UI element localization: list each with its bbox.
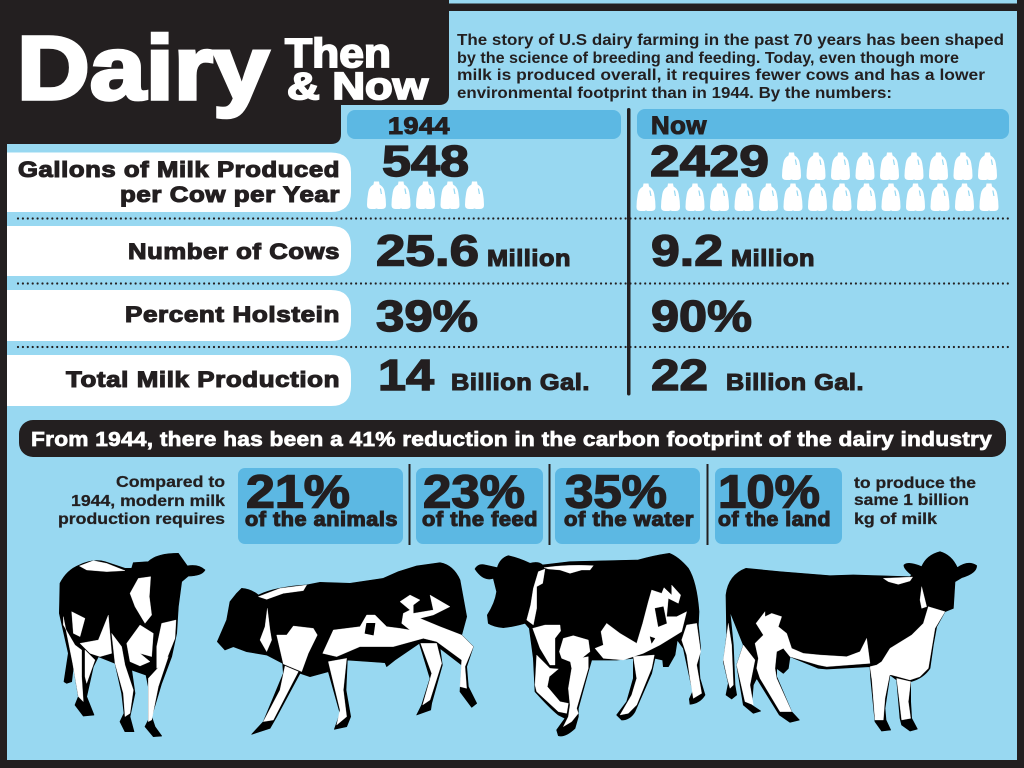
cow 2: side view facing left: [217, 563, 477, 734]
stat box: water: of the water: [564, 509, 694, 531]
value: 22 billion gal: Billion Gal.: [726, 369, 864, 395]
stat box: feed: 23%: [423, 466, 525, 518]
carbon footprint banner: From 1944, there has been a 41% reduction in the carbon footprint of the dairy industry: [31, 429, 993, 451]
intro text: milk is produced overall, it requires fewer cows and has a lower: [457, 67, 985, 84]
column divider: [627, 108, 630, 396]
row label: holstein: Percent Holstein: [125, 302, 340, 327]
title block: & Now: [287, 66, 429, 108]
stat box: water: 35%: [565, 466, 667, 518]
value: 25.6 million: [376, 226, 571, 276]
cow 1: rear view: [59, 553, 205, 737]
stat box: land: of the land: [718, 509, 831, 531]
row label: gallons: Gallons of Milk Produced: [18, 157, 340, 182]
value: 548 gallons with jugs: [367, 137, 484, 209]
cow 4: side view facing right: [723, 552, 977, 731]
intro text: [457, 32, 1004, 102]
title block: Dairy: [17, 19, 269, 119]
right caption: same 1 billion: [854, 492, 969, 509]
left caption: [58, 474, 225, 528]
stat box: animals: of the animals: [245, 509, 398, 531]
value: 2429 gallons with jugs: 2429: [650, 137, 769, 186]
value: 2429 gallons with jugs: [636, 137, 998, 211]
intro text: The story of U.S dairy farming in the past 70 years has been shaped: [457, 32, 1004, 49]
right caption: [854, 475, 976, 528]
value: 25.6 million: 25.6: [376, 226, 479, 276]
value: 22 billion gal: 22: [651, 351, 708, 400]
stat box: animals: [238, 466, 403, 544]
column header: 1944: 1944: [388, 113, 450, 140]
value: 9.2 million: Million: [731, 245, 815, 271]
column header: Now: Now: [651, 112, 707, 140]
value: 9.2 million: 9.2: [651, 226, 723, 276]
right caption: to produce the: [854, 475, 976, 492]
stat box: feed: of the feed: [422, 509, 538, 531]
intro text: by the science of breeding and feeding. Today, even though more: [457, 50, 959, 67]
value: 14 billion gal: [378, 351, 590, 400]
row label: cows: Number of Cows: [128, 239, 340, 264]
right caption: kg of milk: [854, 511, 937, 528]
stat box: land: [715, 466, 842, 544]
stat box: feed: [416, 466, 543, 544]
value: 14 billion gal: 14: [378, 351, 435, 400]
stat dividers: [408, 464, 708, 545]
stat box: animals: 21%: [246, 466, 350, 518]
row label: cows: [7, 226, 351, 276]
stat box: water: [555, 466, 700, 544]
title block: Then: [285, 30, 391, 76]
title block: [0, 0, 449, 144]
value: 22 billion gal: [651, 351, 864, 400]
value: 548 gallons with jugs: 548: [382, 137, 469, 186]
intro text: environmental footprint than in 1944. By the numbers:: [457, 85, 892, 102]
value: 14 billion gal: Billion Gal.: [451, 369, 590, 395]
carbon footprint banner: [19, 420, 1006, 457]
row label: total production: Total Milk Production: [66, 367, 340, 392]
left caption: production requires: [58, 511, 225, 528]
row label: holstein: [7, 290, 351, 341]
row label: total production: [7, 355, 351, 406]
row separators: [18, 218, 1008, 347]
column header: 1944: [347, 110, 621, 140]
left caption: 1944, modern milk: [71, 493, 225, 510]
value: 90%: 90%: [651, 292, 752, 341]
left caption: Compared to: [116, 474, 225, 491]
cow 3: side view facing left: [475, 553, 705, 736]
stat box: land: 10%: [718, 466, 820, 518]
row label: gallons: [7, 152, 351, 212]
value: 25.6 million: Million: [487, 245, 571, 271]
row label: gallons: per Cow per Year: [120, 182, 340, 207]
column header: Now: [637, 109, 1009, 140]
value: 39%: 39%: [376, 292, 478, 341]
value: 9.2 million: [651, 226, 815, 276]
